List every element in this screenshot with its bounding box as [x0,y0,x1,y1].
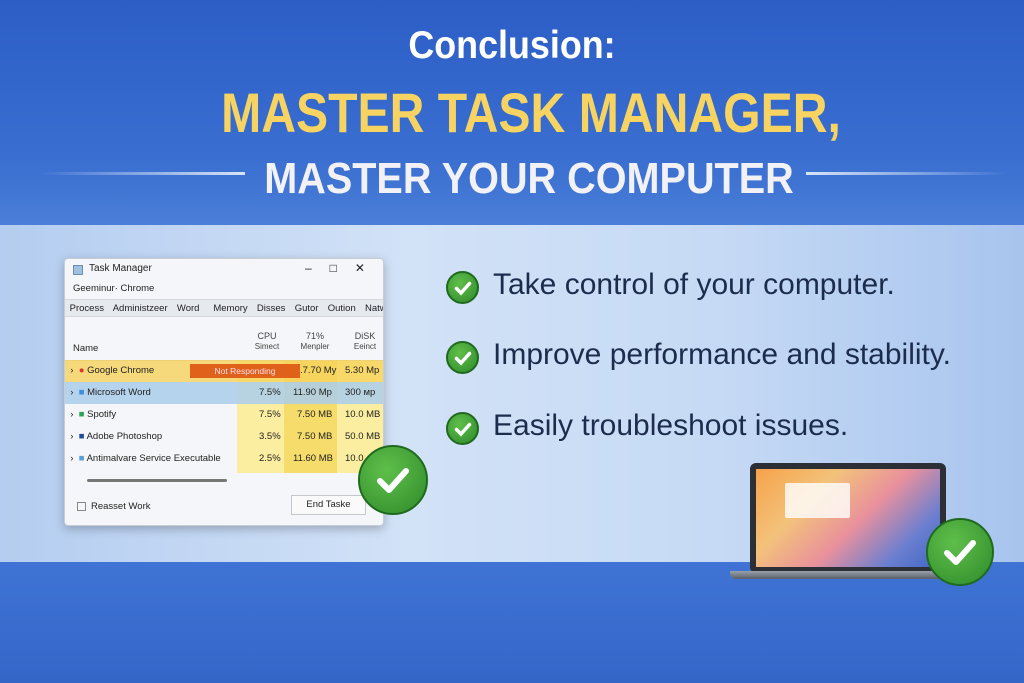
task manager window: End Taske [306,499,351,510]
task manager window: 2.5% [259,453,281,464]
laptop [730,463,946,579]
bullet 3: Easily troubleshoot issues. [493,409,848,442]
task manager window: 10.0 [345,453,364,464]
subtitle with lines: MASTER YOUR COMPUTER [264,154,794,203]
task manager window: Geeminur· Chrome [73,283,154,294]
row word [65,382,383,404]
task manager window: Task Manager [89,263,152,274]
row word: › ■ Microsoft Word [70,387,151,398]
row chrome: 5.30 Mp [345,365,379,376]
task manager window: 7.50 MB [297,409,332,420]
title: master task manager: MASTER TASK MANAGER, [221,81,841,144]
task manager window: 7.5% [259,409,281,420]
row chrome: › ● Google Chrome [70,365,154,376]
task manager window: › ■ Antimalvare Service Executable [70,453,221,464]
bullet 2: Improve performance and stability. [493,338,951,371]
task manager window: 7.50 MB [297,431,332,442]
bullet 1: Take control of your computer. [493,268,895,301]
row word: 11.90 Mp [293,387,332,398]
task manager window: Eeinct [354,342,376,351]
task manager window: › ■ Adobe Photoshop [70,431,162,442]
row word: 7.5% [259,387,281,398]
row chrome: Not Responding [215,366,275,376]
task manager window: 3.5% [259,431,281,442]
task manager window: Simect [255,342,279,351]
task manager window: CPU [257,331,276,341]
row word: 300 мр [345,387,375,398]
icon: check on laptop [926,518,994,586]
task manager window: DiSK [355,331,375,341]
task manager window: › ■ Spotify [70,409,116,420]
task manager window: 71% [306,331,324,341]
icon: check on task manager [358,445,428,515]
task manager window: 10.0 MB [345,409,380,420]
task manager window: 11.60 MB [293,453,333,464]
task manager window: Name [73,343,98,354]
task manager window: –□✕ [305,261,383,275]
row chrome: .7.70 My [300,365,336,376]
task manager window [64,258,384,526]
row chrome [65,360,383,382]
task manager window: Reasset Work [91,501,150,512]
subtitle with lines [50,154,995,203]
task manager window: Menpler [301,342,329,351]
title: conclusion: Conclusion: [408,24,616,67]
task manager window: Process Administzeer Word Memory Disses Gutor Oution Natw [70,303,384,314]
task manager window: 50.0 MB [345,431,380,442]
